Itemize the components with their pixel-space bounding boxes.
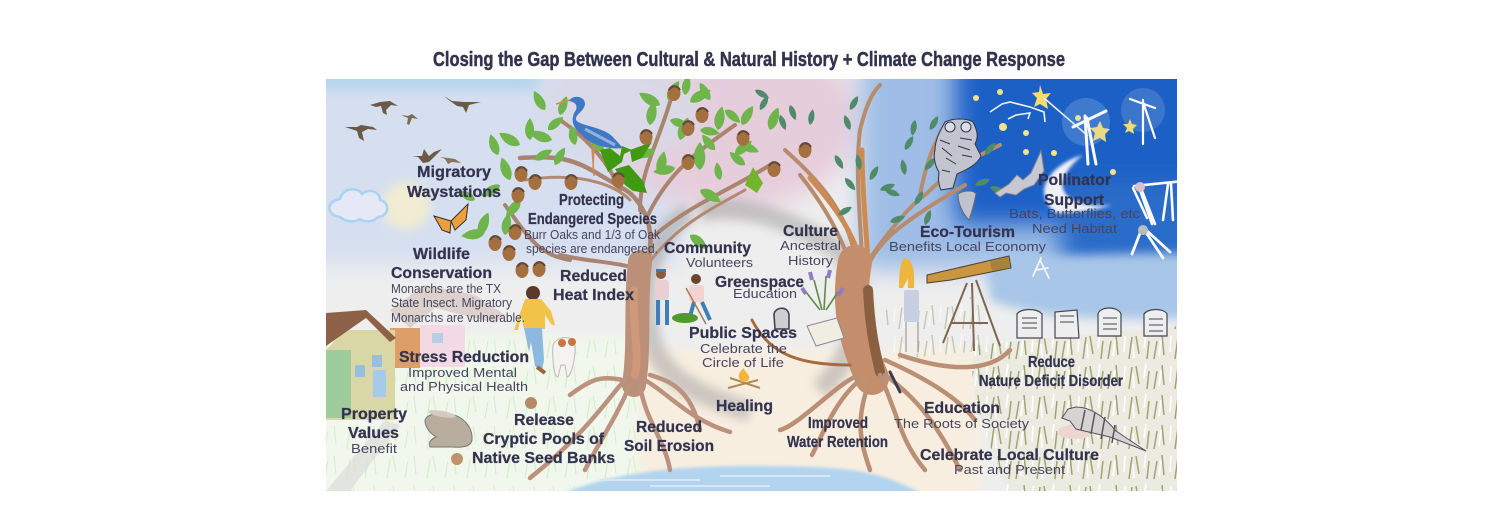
moon [1044,155,1112,213]
label: public spaces: Circle of Life [702,356,784,370]
label: pollinator support: Need Habitat [1032,222,1118,236]
stars and constellations [973,85,1137,175]
left oak tree [505,95,770,478]
label: reduced soil erosion: Soil Erosion [624,438,714,455]
label: improved water retention [787,415,888,451]
label: celebrate local culture: Celebrate Local Culture [920,447,1099,464]
geese [345,96,481,164]
green oak leaves [457,75,782,252]
label: community volunteers: Volunteers [686,256,753,270]
label: protecting endangered species: Endangered Species [528,211,657,228]
label: protecting endangered species: Protecting [559,192,624,209]
label: property values [341,406,407,456]
label: migratory waystations: Waystations [407,184,501,201]
label: improved water retention: Improved [808,415,868,432]
heron [556,97,623,176]
label: community volunteers [664,241,752,267]
gravestones [1017,308,1167,338]
acorns [488,85,812,278]
label: culture: History [788,254,834,268]
label: release seed banks: Release [514,412,574,429]
smoke ring [646,209,858,412]
label: reduce nature deficit disorder: Reduce [1028,354,1075,371]
label: culture [780,223,841,268]
label: celebrate local culture [920,447,1099,477]
label: wildlife conservation [391,246,525,325]
label: public spaces [689,325,797,370]
title: Closing the Gap Between Cultural & Natural History + Climate Change Response [433,49,1065,71]
label: education roots of society: The Roots of Society [894,417,1030,431]
label: improved water retention: Water Retention [787,434,888,451]
label: protecting endangered species [524,192,661,256]
label: release seed banks: Native Seed Banks [472,450,615,467]
label: protecting endangered species: species are endangered. [526,242,658,256]
label: public spaces: Celebrate the [700,342,787,356]
label: eco-tourism: Eco-Tourism [920,224,1015,241]
label: stress reduction: Improved Mental [408,366,517,380]
label: stress reduction: Stress Reduction [399,349,529,366]
monarch butterfly [434,204,468,233]
label: wildlife conservation: State Insect. Migratory [391,296,513,310]
label: wildlife conservation: Monarchs are vulnerable. [391,311,525,325]
label: greenspace: Greenspace [715,274,804,291]
constellation figures [1033,88,1184,278]
label: culture: Culture [783,223,838,240]
label: education roots of society: Education [924,400,1000,417]
label: wildlife conservation: Wildlife [413,246,470,263]
label: culture: Ancestral [780,239,841,253]
label: public spaces: Public Spaces [689,325,797,342]
man with dog [514,286,576,377]
label: greenspace: Education [733,287,797,301]
label: reduced soil erosion: Reduced [636,419,702,436]
label: reduce nature deficit disorder: Nature Deficit Disorder [979,373,1123,390]
background wash [326,79,1177,491]
label: reduced heat index: Heat Index [553,287,634,304]
label: reduced heat index: Reduced [560,268,627,285]
olive leaves [754,87,1006,226]
label: migratory waystations [407,164,501,201]
label: property values: Benefit [351,442,398,456]
label: reduced heat index [554,269,634,300]
sun and cloud [330,182,430,230]
girl [899,258,919,354]
label: reduced soil erosion [624,420,714,452]
label: celebrate local culture: Past and Present [954,463,1066,477]
label: pollinator support: Support [1044,192,1105,209]
telescope [927,256,1011,351]
label: release seed banks [472,412,615,467]
rabbit and mushrooms [425,397,537,465]
houses [326,285,505,420]
label: pollinator support: Bats, Butterflies, etc [1009,207,1140,221]
right tree [752,85,1010,470]
label: pollinator support [1009,172,1140,236]
label: stress reduction: and Physical Health [400,380,528,394]
label: pollinator support: Pollinator [1038,172,1111,189]
label: wildlife conservation: Monarchs are the TX [391,282,502,296]
label: property values: Property [341,406,407,423]
trunk [634,262,640,385]
label: wildlife conservation: Conservation [391,265,492,282]
label: eco-tourism [889,224,1047,254]
label: protecting endangered species: Burr Oaks and 1/3 of Oak [524,228,661,242]
lavender and plaque [774,270,844,346]
illustration panel [326,79,1177,491]
label: community volunteers: Community [664,240,751,257]
label: release seed banks: Cryptic Pools of [483,431,605,448]
label: migratory waystations: Migratory [417,164,491,181]
bats [958,151,1044,220]
label: healing: Healing [716,398,773,415]
campfire [728,368,760,388]
branches [520,157,650,275]
label: property values: Values [348,425,399,442]
volunteers [655,269,710,325]
label: greenspace [715,274,804,301]
armadillo [1057,407,1146,451]
label: eco-tourism: Benefits Local Economy [889,240,1047,254]
owl [934,119,981,190]
label: stress reduction [399,349,529,394]
label: education roots of society [894,400,1030,431]
labels [341,164,1140,477]
roots [530,375,730,478]
label: reduce nature deficit disorder [979,354,1123,390]
